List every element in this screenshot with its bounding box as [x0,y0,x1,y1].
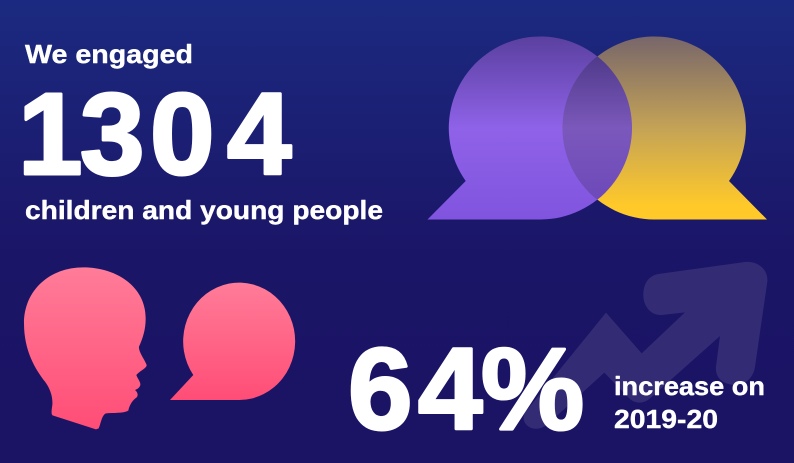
icon: overlapping speech bubbles [428,37,767,220]
text: increase on 2019-20 [614,371,765,434]
bubble overlap [562,56,632,200]
line: 2019-20: 2019-20 [614,404,718,434]
icon: child head profile [24,267,147,429]
icon: pink speech bubble [170,283,295,400]
subheading: children and young people: children and young people [25,195,383,225]
big number: 64%: 64% [348,324,584,454]
big number: 1304: 1304 [18,69,292,199]
line: increase on: increase on [614,371,765,401]
purple speech bubble [428,37,632,220]
heading: we engaged: We engaged [25,39,193,69]
yellow speech bubble [563,37,767,219]
icon: upward trend arrow [524,262,767,429]
